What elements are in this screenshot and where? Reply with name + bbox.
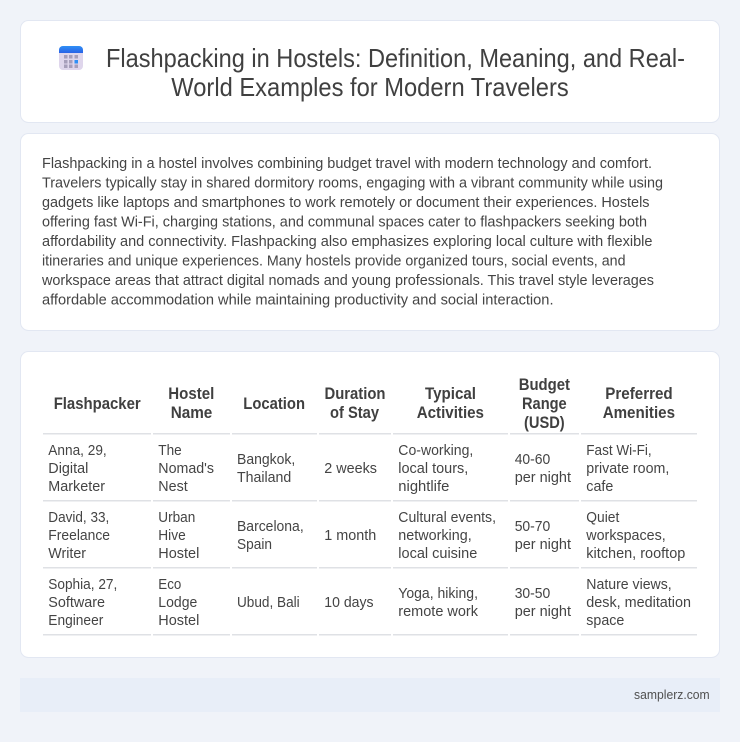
table row: Sophia: Lodge bbox=[158, 594, 197, 611]
table row: Sophia: Nature views, bbox=[586, 576, 672, 593]
icon: calendar bbox=[59, 46, 83, 70]
table row: Anna: cafe bbox=[586, 478, 613, 495]
text block: description paragraph: itineraries and unique experiences. Many hostels provide organized tours, social events, and bbox=[42, 252, 626, 270]
table row: Sophia: 10 days bbox=[324, 594, 374, 611]
table row: Anna: Co-working, bbox=[398, 442, 473, 459]
table row: Anna: The bbox=[158, 442, 182, 459]
table row: Anna: local tours, bbox=[398, 460, 468, 477]
text block: description paragraph bbox=[41, 155, 663, 308]
table header row: Activities bbox=[417, 404, 484, 422]
table row: Sophia: Sophia, 27, bbox=[48, 576, 117, 593]
title bbox=[106, 45, 685, 102]
table row: Anna: Anna, 29, bbox=[48, 442, 107, 459]
table header row: Range bbox=[522, 395, 567, 413]
footer source text: samplerz.com bbox=[634, 687, 710, 702]
table row: David: Freelance bbox=[48, 527, 110, 544]
table row: Anna: Fast Wi-Fi, bbox=[586, 442, 652, 459]
table row: Anna: nightlife bbox=[398, 478, 449, 495]
table row: David: workspaces, bbox=[585, 527, 666, 544]
table header row bbox=[54, 376, 675, 432]
table row: David: Hostel bbox=[158, 545, 199, 562]
table row: David: per night bbox=[515, 536, 572, 553]
table header row: Hostel bbox=[168, 385, 214, 403]
table row: Anna: per night bbox=[515, 469, 572, 486]
table row: Sophia: 30-50 bbox=[515, 585, 550, 602]
table row: Anna: Digital bbox=[48, 460, 88, 477]
text block: description paragraph: workspace areas that attract digital nomads and young professionals. This travel style leverages bbox=[41, 272, 654, 289]
table row: Sophia: Software bbox=[48, 594, 105, 611]
table row: Sophia: desk, meditation bbox=[586, 594, 691, 611]
table row: Sophia: per night bbox=[515, 603, 572, 620]
table header row: Preferred bbox=[605, 385, 673, 403]
table row: David: 1 month bbox=[324, 527, 376, 544]
table row: David: David, 33, bbox=[48, 509, 109, 526]
text block: description paragraph: affordable accommodation while maintaining productivity and social interaction. bbox=[42, 292, 554, 308]
panel: table card bbox=[20, 352, 720, 658]
table header row: Amenities bbox=[603, 404, 675, 422]
table header row: Location bbox=[243, 395, 305, 413]
table row: David: Writer bbox=[48, 545, 86, 562]
text block: description paragraph: Flashpacking in a hostel involves combining budget travel with modern technology and comfort. bbox=[42, 155, 652, 172]
table header row: Duration bbox=[324, 385, 386, 403]
table row: Anna: 2 weeks bbox=[324, 460, 377, 477]
table row: David: Hive bbox=[158, 527, 186, 544]
table row: Anna: private room, bbox=[586, 460, 669, 477]
table row: Sophia: Ubud, Bali bbox=[237, 594, 300, 611]
table row: Anna bbox=[48, 442, 669, 495]
table header row: (USD) bbox=[524, 414, 565, 432]
table row: David: Barcelona, bbox=[237, 518, 304, 535]
table row: Anna: Nest bbox=[158, 478, 188, 495]
table row: David: Urban bbox=[158, 509, 195, 526]
table row: David bbox=[48, 509, 685, 562]
table row: Anna: Thailand bbox=[237, 469, 291, 486]
table row: Sophia: Engineer bbox=[48, 612, 103, 629]
table row: David: Cultural events, bbox=[398, 509, 496, 526]
table row: David: networking, bbox=[398, 527, 472, 544]
text block: description paragraph: gadgets like laptops and smartphones to work remotely or document their experiences. Hostels bbox=[42, 194, 650, 211]
text block: description paragraph: Travelers typically stay in shared dormitory rooms, engaging with a vibrant community while using bbox=[42, 174, 663, 192]
title: Flashpacking in Hostels: Definition, Meaning, and Real- bbox=[106, 45, 685, 73]
table header row: Name bbox=[171, 404, 212, 422]
text block: description paragraph: affordability and connectivity. Flashpacking also emphasizes exploring local culture with flexible bbox=[42, 233, 652, 250]
footer bar bbox=[20, 678, 720, 712]
table row: Sophia: Yoga, hiking, bbox=[398, 585, 478, 602]
table row: David: local cuisine bbox=[398, 545, 477, 562]
table header row: Typical bbox=[425, 385, 476, 403]
table row: Sophia bbox=[48, 576, 691, 629]
table row: Sophia: remote work bbox=[398, 603, 478, 620]
table row: Anna: 40-60 bbox=[515, 451, 550, 468]
table row: David: 50-70 bbox=[515, 518, 550, 535]
table row: David: Quiet bbox=[586, 509, 620, 526]
table row: David: Spain bbox=[237, 536, 272, 553]
table row: David: kitchen, rooftop bbox=[586, 545, 685, 562]
table header row: Budget bbox=[519, 376, 571, 394]
panel: title header bbox=[20, 20, 720, 122]
table row: Anna: Marketer bbox=[48, 478, 105, 495]
title: World Examples for Modern Travelers bbox=[171, 74, 569, 102]
table header row: of Stay bbox=[330, 404, 379, 422]
table header row: Flashpacker bbox=[54, 395, 141, 413]
table row: Sophia: space bbox=[586, 612, 624, 629]
text block: description paragraph: offering fast Wi-Fi, charging stations, and communal spaces cater to flashpackers seeking both bbox=[42, 214, 647, 230]
panel: description bbox=[20, 134, 720, 330]
table row: Anna: Bangkok, bbox=[237, 451, 295, 468]
table row: Anna: Nomad's bbox=[158, 460, 214, 477]
table row: Sophia: Hostel bbox=[158, 612, 199, 629]
table row: Sophia: Eco bbox=[158, 576, 181, 593]
